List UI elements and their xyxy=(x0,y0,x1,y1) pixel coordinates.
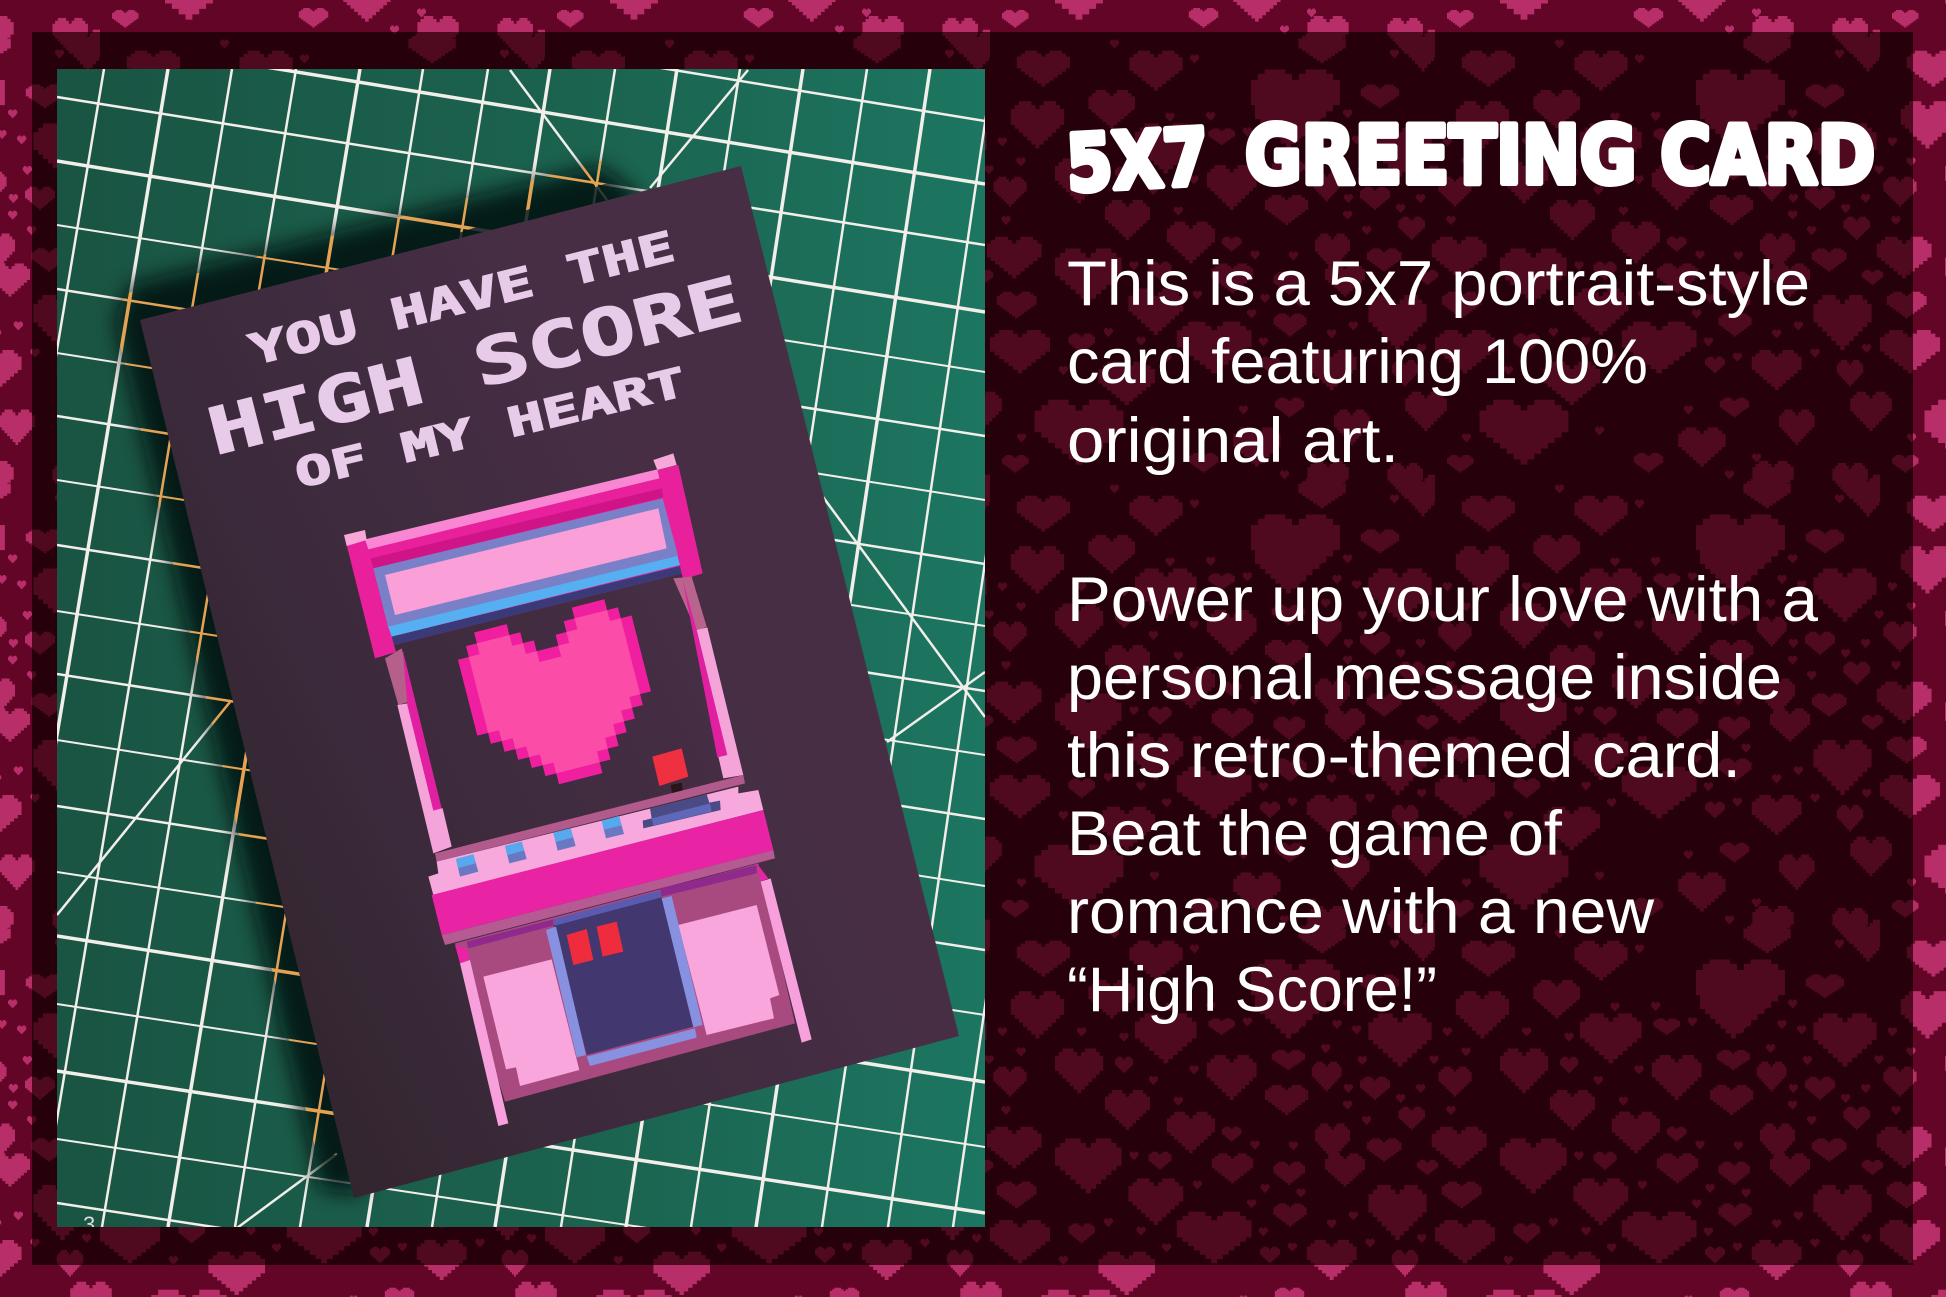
text block: second paragraph: this retro-themed card. xyxy=(1067,721,1741,791)
text block: intro paragraph xyxy=(1067,249,1810,476)
blue strip xyxy=(388,556,680,637)
door top strip xyxy=(553,891,662,926)
card shadow on mat xyxy=(115,165,640,1195)
cutting mat base xyxy=(57,69,985,1227)
arcade cabinet illustration: marquee xyxy=(344,453,743,853)
center coin door xyxy=(553,897,693,1055)
arcade cabinet illustration: control panel and base xyxy=(428,775,812,1126)
door right strip xyxy=(662,896,703,1027)
text block: second paragraph xyxy=(1067,565,1819,1025)
left cap xyxy=(344,530,367,546)
line: high score: HIGH SCORE xyxy=(201,263,750,471)
text block: intro paragraph: This is a 5x7 portrait-style xyxy=(1067,249,1810,319)
card body xyxy=(140,166,959,1198)
title: 5x7 greeting card xyxy=(1064,109,1875,210)
dark magenta strip xyxy=(371,488,663,568)
mauve strip above controls xyxy=(435,775,745,862)
text block: second paragraph: Power up your love with a xyxy=(1067,565,1819,635)
cutting mat white grid xyxy=(57,69,985,1227)
door bottom strip xyxy=(587,1028,697,1066)
text block: intro paragraph: original art. xyxy=(1067,406,1399,476)
marquee top highlight xyxy=(365,469,659,549)
joystick stick xyxy=(670,782,683,793)
right cap xyxy=(653,453,677,470)
periwinkle frame xyxy=(373,498,678,628)
panel: product photo of card on cutting mat xyxy=(57,69,985,1227)
navy strip xyxy=(392,566,682,645)
control buttons xyxy=(456,816,624,877)
door left strip xyxy=(546,927,586,1057)
title part: 5x7: 5X7 xyxy=(1064,113,1211,210)
purple trim xyxy=(467,865,757,948)
text block: second paragraph: “High Score!” xyxy=(1067,955,1437,1025)
line: of my heart: OF MY HEART xyxy=(291,360,690,498)
side rails xyxy=(460,878,812,1126)
marquee magenta block xyxy=(347,465,703,658)
text block: second paragraph: Beat the game of xyxy=(1067,799,1563,869)
card headline text xyxy=(201,222,750,498)
right door panel xyxy=(678,905,779,1035)
line: you have the: YOU HAVE THE xyxy=(245,222,679,375)
arcade screen heart xyxy=(458,599,651,784)
red coin slots xyxy=(567,922,623,965)
left pillar xyxy=(385,648,452,853)
control panel top xyxy=(428,787,763,895)
greeting card xyxy=(140,166,959,1198)
text block: second paragraph: romance with a new xyxy=(1067,877,1655,947)
left door panel xyxy=(483,959,579,1086)
magenta front xyxy=(432,810,773,935)
mat number: 3 xyxy=(83,1212,95,1237)
right pillar xyxy=(673,577,743,778)
magenta side bits xyxy=(455,863,768,963)
text block: intro paragraph: card featuring 100% xyxy=(1067,327,1648,397)
base body xyxy=(455,863,795,1102)
joystick ball xyxy=(652,748,688,786)
orange-lit grid lines in the shadow xyxy=(120,160,607,1156)
mauve lower strip xyxy=(442,850,775,945)
marquee pink panel xyxy=(385,508,667,615)
text block: second paragraph: personal message inside xyxy=(1067,643,1782,713)
joystick base xyxy=(643,794,721,828)
